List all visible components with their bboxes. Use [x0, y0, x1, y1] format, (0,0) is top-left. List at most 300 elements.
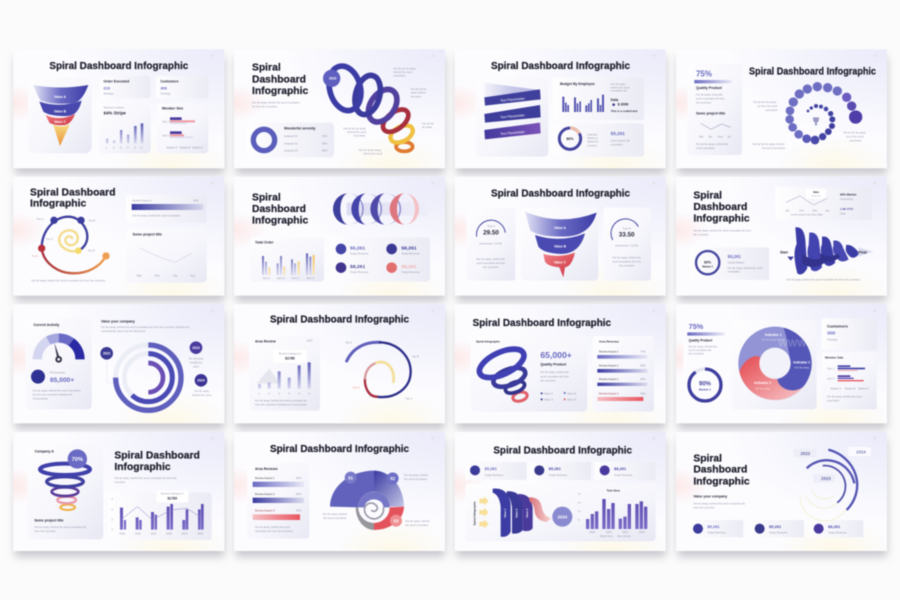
panel: main: Text Here [607, 488, 620, 492]
panel: area revenue: 85% [640, 363, 646, 367]
panel: bar line chart: 2022 [151, 532, 157, 536]
callout labels: away behind [411, 91, 426, 95]
quadrant: lower right slides [455, 304, 887, 557]
panel: main: 2023 [639, 530, 645, 534]
callout labels: Far far far far away [343, 127, 366, 130]
panel: current activity: Far far away, behind the word mountains [33, 389, 81, 392]
panel: member size: Item 2 [162, 134, 170, 138]
panel: quality product: the countries [696, 100, 712, 104]
panel: stripe bar chart: 5 [134, 145, 136, 149]
panel: line chart: 90% Market [840, 192, 856, 196]
callout labels: Far far far far away, behind [753, 143, 784, 146]
panel: bar line chart: 2021 [135, 532, 141, 536]
panel: member sale: Member Sale [825, 356, 844, 360]
panel: area reviews: Review Aspect 2 [255, 492, 275, 496]
title: Spiral Dashboard [30, 188, 116, 199]
panel: market donut: Market 1 [702, 265, 714, 269]
spiral sectors: 02 [390, 476, 396, 481]
year badges: 2023 [192, 346, 200, 350]
panel: market donut: 80% [704, 260, 711, 264]
panel: budget by employee: $ 3999 [618, 103, 628, 107]
panel: gauge type B: 33.50 [619, 231, 635, 238]
slide 10: area review and spiral [249, 315, 419, 411]
panel: bar line chart: 1 [111, 527, 113, 531]
slide 4: crescents and total order [250, 192, 435, 282]
panel: member size: Item 1 [162, 120, 170, 124]
labels [780, 250, 867, 281]
callout labels [323, 473, 430, 527]
panel: total order [250, 237, 324, 282]
year badges: 2024 [197, 379, 205, 383]
slide 15: ribbons and bars [465, 445, 656, 541]
panel: customers [156, 76, 208, 98]
panel: main: Value 3 [525, 508, 529, 518]
stat cards: $8,261 [614, 466, 627, 471]
panel: wonderful serenity: Analysis 03 [284, 149, 298, 153]
panel: review aspect [126, 195, 207, 223]
panel: revenue stats: Today Revenue [350, 251, 369, 255]
panel: area review chart: 3 [278, 391, 280, 395]
panel: revenue stats: $8,261 [350, 264, 365, 270]
text block: from the countries [693, 505, 715, 509]
tier labels: Tier C [46, 237, 53, 241]
panel: ribbons: Text Placeholder [500, 130, 526, 136]
callout labels: the word mountains [323, 516, 347, 520]
year badges: behind the [190, 360, 203, 364]
panel: area reviews [247, 463, 309, 539]
panel: swirl donut: Indicator 1 [765, 333, 782, 337]
panel: total order: Total Order [255, 240, 274, 244]
panel: funnel: Value A [54, 95, 67, 99]
panel: line chart: Scheduling [840, 197, 854, 201]
panel: swirl donut: Far far away behind [762, 338, 786, 342]
stat cards: $5,261 [549, 466, 562, 471]
panel: stripe bar chart [99, 103, 151, 153]
tier labels: Tier E [31, 254, 39, 258]
text block: Value your company [693, 495, 727, 499]
labels [345, 340, 419, 400]
stat cards: Today Revenue [485, 473, 504, 477]
callout labels: Far far far [422, 122, 434, 125]
panel: bar line chart: $1780 [167, 496, 177, 500]
panel: customers: 300 [827, 331, 836, 337]
panel: member sale: Item 1 [827, 366, 835, 370]
stat cards: Today Revenue [707, 531, 726, 535]
panel: line chart: Some project title [133, 232, 162, 236]
panel: swirl donut: Indicator 2 [793, 360, 810, 364]
panel: gauge type A: Far far away, behind the [476, 258, 505, 261]
tier labels: Tier A [37, 217, 44, 221]
panel: donut stats: $5,261 [611, 131, 625, 136]
panel: stripe bar chart: 6 [141, 145, 143, 149]
panel: member size: Market C [192, 145, 203, 149]
panel: line chart: Lorem ipsum text item data [791, 213, 823, 217]
panel: bar line chart: 2023 [166, 532, 172, 536]
panel: funnel: Value B [554, 244, 567, 248]
labels: Top D [353, 386, 360, 390]
panel: line chart: Aug [190, 274, 196, 278]
panel: company A: from the countries [34, 529, 56, 533]
panel: line chart: 1.8K ETH [840, 207, 853, 211]
title: Spiral Dashboard [114, 450, 200, 461]
stat cards [689, 520, 863, 537]
text block [101, 319, 190, 333]
callout labels: the word mountains [404, 477, 428, 481]
title: Spiral Dashboard Infographic [473, 318, 611, 329]
callout labels: mountains [353, 134, 366, 138]
callout labels: the word mountains [405, 523, 429, 527]
text block [693, 495, 745, 509]
panel: main: 50 [578, 520, 581, 522]
title: Infographic [252, 86, 308, 97]
panel: bar line chart: 2025 [197, 532, 204, 536]
panel: customers: Package [160, 91, 171, 95]
panel: revenue stats: Today Revenue [401, 251, 420, 255]
panel: member size [157, 103, 208, 153]
panel: stripe bar chart: 64% Stripe [104, 110, 126, 115]
text block: Value your company [101, 319, 135, 323]
panel: bar line chart: 2024 [182, 532, 188, 536]
panel: stripe bar chart: 2 [113, 145, 115, 149]
panel: line chart: Data [840, 211, 846, 215]
panel: spiral infographic: word mountains far from [540, 374, 570, 378]
panel: area revenue: 75% [640, 349, 646, 353]
stat cards: $5,261 [769, 524, 782, 529]
panel: area review chart: 2022 [307, 338, 313, 342]
panel: main: 2021 [606, 530, 612, 534]
tier labels: Tier B [88, 218, 96, 222]
slide 5: ribbons [476, 61, 644, 157]
panel: bar line chart: 2020 [119, 532, 126, 536]
text block: Far far away, behind the word mountains far from the countries [31, 279, 106, 283]
panel: funnel: Value B [54, 109, 67, 113]
panel: line chart: Apr [825, 209, 830, 213]
slide 12: spiral sectors [247, 444, 430, 539]
panel: area review chart: 5 [298, 391, 300, 395]
panel: quality product: Far far away, behind the [689, 345, 717, 348]
panel: order executed [100, 76, 151, 98]
panel: quality product: Far far away, long side [696, 93, 723, 96]
year labels [794, 447, 871, 483]
panel: gauge type B: word mountains far from [612, 260, 642, 264]
panel: market donut: $5,261 [728, 254, 741, 259]
title: Infographic [693, 476, 750, 487]
panel: area review chart: 2 [268, 391, 270, 395]
callout labels: the word [411, 94, 421, 98]
callout labels: the word mountains [762, 146, 786, 150]
panel: area revenue: 65% [640, 377, 646, 381]
callout labels: up from the word [757, 104, 778, 108]
stat cards: $8,261 [828, 524, 841, 529]
panel: member sale: Market C [858, 387, 869, 391]
panel: bar line chart [108, 491, 212, 540]
panel: total order: Item 2 [277, 276, 285, 280]
title: Dashboard [252, 74, 306, 85]
stat cards: $5,261 [707, 524, 720, 529]
title: Infographic [252, 216, 308, 227]
panel: market donut: Global Market [728, 261, 744, 265]
callout labels: Far far away, behind [405, 520, 429, 523]
spiral diagram [347, 342, 411, 397]
concentric rings [107, 345, 201, 410]
panel: quality product: Some project title [696, 112, 725, 116]
panel: funnel [28, 77, 92, 153]
panel: stripe bar chart: 3 [120, 145, 122, 149]
panel: customers: 300 [160, 86, 168, 91]
panel: quality product: 75% [696, 70, 712, 79]
panel: gauge type B: Type B [623, 226, 631, 230]
year badges: word [193, 364, 199, 368]
panel: main: Item Group [617, 534, 631, 538]
labels: Start [780, 251, 789, 255]
ribbon spiral [787, 227, 859, 275]
panel: line chart: May [137, 274, 143, 278]
panel: review aspect: 80% [193, 199, 199, 203]
panel: line chart: June [154, 274, 160, 278]
callout labels: behind the word [363, 152, 383, 156]
panel: member sale [822, 353, 877, 409]
panel: market donut: mountains [728, 270, 741, 274]
panel: main: Spiral Infographic [472, 501, 476, 525]
callout labels: Far far away, behind [323, 513, 347, 516]
text block: Far far away, behind the word mountains far from the [114, 477, 177, 480]
spiral diagram [38, 217, 110, 273]
panel: main: 2022 [622, 530, 629, 534]
title: Spiral Dashboard Infographic [270, 444, 409, 455]
panel: total order: Item 3 [292, 276, 300, 280]
panel: donut stats: Market A [587, 136, 598, 140]
panel: funnel: Value C [54, 120, 67, 124]
panel: donut stats: Content [587, 143, 597, 147]
panel: gauge type B: the countries [619, 264, 635, 268]
panel: swirl donut: Far far away [795, 366, 810, 370]
panel: line chart: Some text [812, 195, 821, 198]
slide 9: gauge and rings [26, 318, 212, 410]
panel: bar line chart: 2 [111, 517, 113, 521]
panel: line chart: Mar [813, 209, 817, 213]
panel: market donut [689, 247, 769, 280]
arrow [858, 247, 873, 257]
panel: area reviews: Far far away, behind the word [255, 526, 290, 529]
panel: line chart [126, 228, 207, 283]
panel: member size: Member Size [162, 107, 183, 111]
panel: gauge type A: Investment • 14.2% [479, 241, 503, 245]
panel: member sale: mountains [827, 398, 840, 402]
year badges: Far far away [194, 390, 209, 393]
panel: swirl donut: Indicator 3 [754, 381, 771, 385]
panel: spiral infographic: Value C [544, 397, 553, 401]
panel: gauge type A: Type A [487, 224, 495, 228]
panel: bar line chart: 3 [111, 507, 113, 511]
panel: spiral infographic [471, 336, 587, 412]
callout labels: far away [422, 125, 433, 129]
title: Dashboard [693, 202, 747, 213]
labels: Final [859, 250, 867, 254]
panel: area reviews: 90% [296, 508, 302, 512]
year badges: 2022 [103, 352, 111, 356]
panel: area revenue: Area Revenue [599, 340, 619, 344]
callout labels: Far far far far [411, 88, 426, 91]
panel: gauge type A: 29.50 [483, 229, 499, 236]
panel: member sale: Item 2 [827, 376, 835, 380]
panel: spiral infographic: Value D [567, 397, 576, 401]
year labels: 2023 [821, 476, 831, 481]
panel: current activity: Consonantia [33, 396, 48, 400]
panel: budget by employee: Budget By Employee [560, 82, 595, 86]
callout labels: Far far far far away [359, 149, 381, 152]
panel: revenue stats: $8,261 [401, 245, 417, 251]
panel: area review chart: Area Review [255, 339, 276, 343]
title: Infographic [114, 462, 171, 473]
panel: order executed: Order Executed [103, 79, 129, 83]
panel: area revenue: Review Aspect 1 [599, 363, 619, 367]
callout labels: behind the word [347, 130, 367, 134]
panel: member sale: Market A [831, 387, 841, 391]
panel: main: Value 1 [503, 508, 507, 518]
panel: area review chart: Review Category A [279, 351, 302, 355]
panel: swirl donut: Far far away [755, 386, 771, 390]
panel: gauge type A: the countries [483, 265, 499, 269]
panel: wonderful serenity: Analysis 02 [284, 141, 298, 145]
title: Dashboard [252, 204, 306, 215]
panel: gauge type B [603, 208, 651, 281]
panel: area review chart: $1780 [285, 356, 295, 360]
stat cards: Today Revenue [769, 531, 788, 535]
panel: review aspect: Review Aspect 1 [132, 199, 152, 203]
panel: line chart: Feb [799, 209, 804, 213]
title: Spiral [693, 453, 722, 464]
panel: gauge type B: Far far away, behind the [612, 257, 641, 260]
panel: member sale: Far far away, behind the word [827, 395, 862, 398]
panel: ribbons [476, 77, 548, 157]
callout labels: Far far away, behind [404, 474, 428, 477]
panel: quality product: Quality Product [689, 338, 713, 342]
panel: budget by employee [553, 77, 644, 120]
panel: stripe bar chart: 4 [127, 145, 129, 149]
panel: company A [27, 445, 103, 539]
panel: company A: Some project title [34, 518, 64, 522]
panel: bar line chart: 4 [111, 497, 113, 501]
panel: quality product [683, 318, 729, 410]
panel: area reviews: Area Reviews [255, 467, 278, 471]
panel: company A: Far far away, behind the word mountains far [34, 526, 86, 529]
text block: Far far away, behind the word mountains far from [693, 229, 751, 232]
panel: main: Value 2 [514, 508, 518, 518]
year badges [100, 341, 212, 397]
panel: main: 350 [578, 494, 582, 496]
title: Spiral Dashboard Infographic [491, 189, 630, 200]
title: Spiral Dashboard Infographic [493, 445, 632, 456]
labels: Top C [405, 396, 412, 400]
panel: ribbons: Text Placeholder [500, 113, 526, 119]
panel: area revenue: 90% [640, 392, 646, 396]
stat cards: Today Revenue [549, 473, 568, 477]
panel: quality product: word mountains far [689, 348, 711, 352]
year badges: behind the word [192, 393, 212, 397]
panel: main: 250 [578, 502, 582, 504]
tier labels [31, 217, 96, 258]
panel: funnel: Value A [554, 226, 567, 230]
panel: area revenue [593, 336, 654, 412]
panel: wonderful serenity [247, 123, 334, 157]
panel: area revenue: Review Aspect 1 [599, 392, 619, 396]
panel: budget by employee: Data [611, 98, 618, 102]
panel: area review chart [249, 335, 320, 411]
quadrant: lower left slides [13, 304, 445, 557]
panel: spiral infographic: Far far away, behind the [540, 371, 569, 374]
panel: area revenue: Review Aspect 1 [599, 349, 619, 353]
panel: main [465, 483, 656, 541]
panel: market donut: Far far away, behind the word [728, 267, 763, 270]
panel: company A: 70% [72, 457, 83, 463]
panel: main: 2020 [589, 530, 596, 534]
stat cards: Today Revenue [828, 531, 847, 535]
panel: area reviews: 80% [296, 476, 302, 480]
panel: area review chart: 6 [308, 391, 310, 395]
slide 1: funnel dashboard [28, 61, 208, 153]
slide 11: ring tornado [27, 445, 212, 540]
panel: revenue stats [329, 237, 430, 282]
panel: area review chart: from the countries Vokalia and Consonantia [255, 402, 307, 406]
panel: area revenue: Review Aspect 1 [599, 377, 619, 381]
callout labels: out of the word [846, 134, 864, 138]
panel: wonderful serenity: 48% [322, 141, 328, 145]
panel: revenue stats: Today Revenue [350, 270, 369, 274]
year labels: 2024 [856, 449, 866, 454]
panel: swirl donut: WWW [778, 339, 807, 350]
concentric arcs [800, 450, 857, 521]
panel: member size: Market B [180, 145, 191, 149]
panel: quality product: June [717, 134, 724, 138]
panel: member size: Market A [167, 145, 177, 149]
text block: Far far away, behind the word mountains far [693, 502, 745, 505]
slide 3: spiral tiers [30, 188, 207, 283]
panel: order executed: Package [103, 91, 114, 95]
panel: wonderful serenity: Wonderful serenity [284, 126, 316, 130]
slide 8: ribbon spiral [689, 187, 873, 281]
panel: wonderful serenity: 66% [322, 149, 328, 153]
panel: quality product: word mountains far from [696, 96, 725, 100]
panel: line chart [775, 187, 872, 220]
panel: area review chart: 4 [288, 391, 290, 395]
crescent rings [333, 193, 419, 225]
panel: current activity: Performance [50, 371, 66, 375]
callout labels: Far far far the away [753, 101, 776, 104]
panel: donut stats: Lorem ipsum far [611, 139, 630, 142]
title: Spiral Dashboard Infographic [491, 61, 630, 72]
title: Spiral Dashboard Infographic [49, 61, 189, 72]
tier labels: Tier D [88, 249, 95, 253]
panel: spiral infographic: Value A [544, 391, 553, 395]
ring spiral: 2023 [329, 77, 337, 81]
panel: spiral infographic: Quality Product [540, 363, 567, 367]
panel: total order: Item 4 [307, 276, 315, 280]
panel: wonderful serenity: Analysis 01 [284, 134, 298, 138]
panel: company A: Company A [35, 450, 54, 454]
text block: far from the countries [252, 104, 278, 108]
panel: quality product: Far far far away, behind the [696, 143, 728, 146]
panel: main: 150 [578, 511, 582, 513]
callout labels: mountains [765, 108, 778, 112]
title: Spiral [252, 192, 281, 203]
panel: member sale: Market B [845, 387, 856, 391]
callout labels [343, 66, 434, 156]
title: Infographic [30, 198, 86, 209]
slide 14: donut swirl [683, 318, 877, 410]
panel: donut stats: Market B [587, 140, 598, 144]
panel: main: Brand Item [600, 534, 614, 538]
panel: donut stats: Indicator [587, 133, 598, 136]
